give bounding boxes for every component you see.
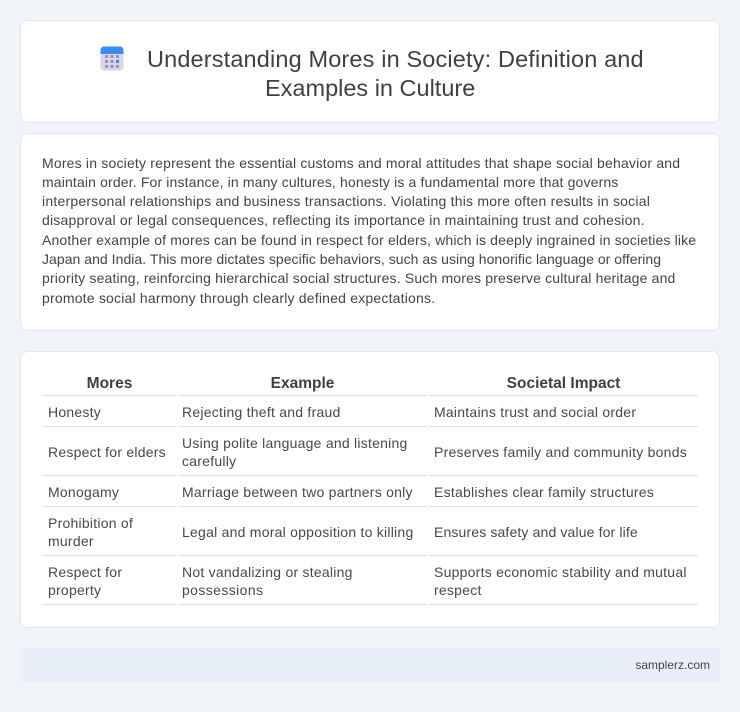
- text block: description paragraph: Japan and India. This more dictates specific behaviors, such as using honorific language or offering: [42, 251, 661, 267]
- row: Prohibition of murder: murder: [48, 533, 94, 549]
- row: Respect for elders: Preserves family and community bonds: [434, 444, 687, 460]
- row: Respect for elders: Respect for elders: [48, 444, 166, 460]
- table header: Mores: [87, 375, 132, 392]
- table header: Societal Impact: [507, 375, 620, 392]
- text block: description paragraph: disapproval or legal consequences, reflecting its importance in maintaining trust and cohesion.: [42, 212, 645, 228]
- text block: description paragraph: interpersonal relationships and business transactions. Violating this more often results in social: [42, 193, 650, 209]
- row: Honesty: [48, 404, 636, 420]
- footer text: samplerz.com: [635, 658, 710, 672]
- row: Monogamy: [48, 484, 654, 500]
- row: Respect for elders: [48, 435, 687, 469]
- row: Honesty: Rejecting theft and fraud: [182, 404, 341, 420]
- row: Prohibition of murder: Prohibition of: [48, 515, 133, 531]
- row: Respect for property: possessions: [182, 582, 263, 598]
- row: Prohibition of murder: Legal and moral opposition to killing: [182, 524, 413, 540]
- table header: [87, 375, 620, 392]
- row: Prohibition of murder: Ensures safety and value for life: [434, 524, 638, 540]
- row: Monogamy: Marriage between two partners only: [182, 484, 413, 500]
- text block: description paragraph: promote social harmony through clearly defined expectations.: [42, 290, 435, 306]
- row: Respect for elders: Using polite language and listening: [182, 435, 408, 451]
- row: Prohibition of murder: [48, 515, 638, 549]
- row: Respect for property: Supports economic stability and mutual: [434, 564, 687, 580]
- row: Monogamy: Establishes clear family structures: [434, 484, 654, 500]
- title: Examples in Culture: [265, 75, 475, 101]
- row: Respect for property: property: [48, 582, 101, 598]
- text block: description paragraph: [42, 155, 696, 306]
- row: Monogamy: Monogamy: [48, 484, 119, 500]
- panel: description: [20, 133, 720, 331]
- table: [43, 375, 698, 605]
- row: Respect for property: respect: [434, 582, 482, 598]
- row: Respect for property: [48, 564, 687, 598]
- row: Honesty: Maintains trust and social order: [434, 404, 636, 420]
- text block: description paragraph: priority seating, reinforcing hierarchical social structures. Such mores preserve cultural heritage and: [42, 270, 675, 286]
- text block: description paragraph: Mores in society represent the essential customs and moral attitudes that shape social behavior and: [42, 155, 680, 171]
- title: [147, 46, 644, 101]
- title: Understanding Mores in Society: Definition and: [147, 46, 644, 72]
- panel: table card: [20, 351, 720, 628]
- panel: title card: [20, 20, 720, 123]
- footer bar: [20, 648, 720, 682]
- table header: Example: [271, 375, 334, 392]
- text block: description paragraph: Another example of mores can be found in respect for elders, which is deeply ingrained in societies like: [42, 232, 696, 248]
- row: Honesty: Honesty: [48, 404, 101, 420]
- row: Respect for property: Respect for: [48, 564, 122, 580]
- row: Respect for elders: carefully: [182, 453, 236, 469]
- row: Respect for property: Not vandalizing or stealing: [182, 564, 353, 580]
- text block: description paragraph: maintain order. For instance, in many cultures, honesty is a fundamental more that governs: [42, 174, 618, 190]
- icon: calendar: [100, 46, 124, 70]
